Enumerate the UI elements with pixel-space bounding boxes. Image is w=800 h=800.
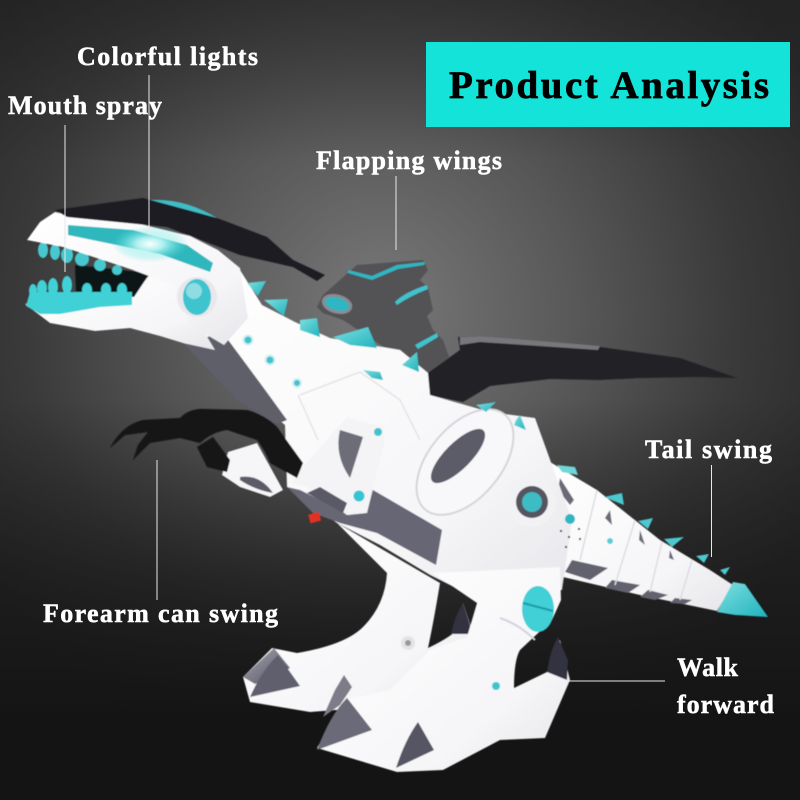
- right wing: [412, 336, 737, 402]
- label: colorful lights: Colorful lights: [77, 42, 258, 71]
- label: forearm can swing: Forearm can swing: [43, 599, 278, 628]
- tail: [530, 462, 768, 617]
- back leg: [243, 523, 472, 717]
- label: flapping wings: Flapping wings: [316, 146, 502, 175]
- body spikes: [247, 281, 526, 430]
- title banner: Product Analysis: [449, 64, 769, 107]
- label: forward: forward: [677, 690, 775, 719]
- chest panels: [298, 372, 420, 440]
- upper wing: [317, 260, 450, 376]
- red switch: [308, 512, 321, 523]
- dinosaur toy: [25, 198, 768, 772]
- neck and torso: [180, 270, 572, 600]
- title banner: [426, 42, 790, 127]
- forearm claws: [110, 409, 303, 478]
- label: walk forward: Walk: [677, 653, 739, 682]
- label: mouth spray: Mouth spray: [8, 91, 162, 120]
- head: [25, 198, 325, 350]
- forearm: [222, 443, 283, 497]
- hip socket and speaker: [398, 391, 581, 548]
- gray belly: [287, 487, 442, 565]
- neck studs: [228, 312, 301, 387]
- shoulder plate: [292, 417, 385, 515]
- label: tail swing: Tail swing: [645, 435, 772, 464]
- front leg and foot: [317, 567, 570, 772]
- leader lines: [65, 75, 712, 681]
- neck armour plates: [183, 333, 287, 424]
